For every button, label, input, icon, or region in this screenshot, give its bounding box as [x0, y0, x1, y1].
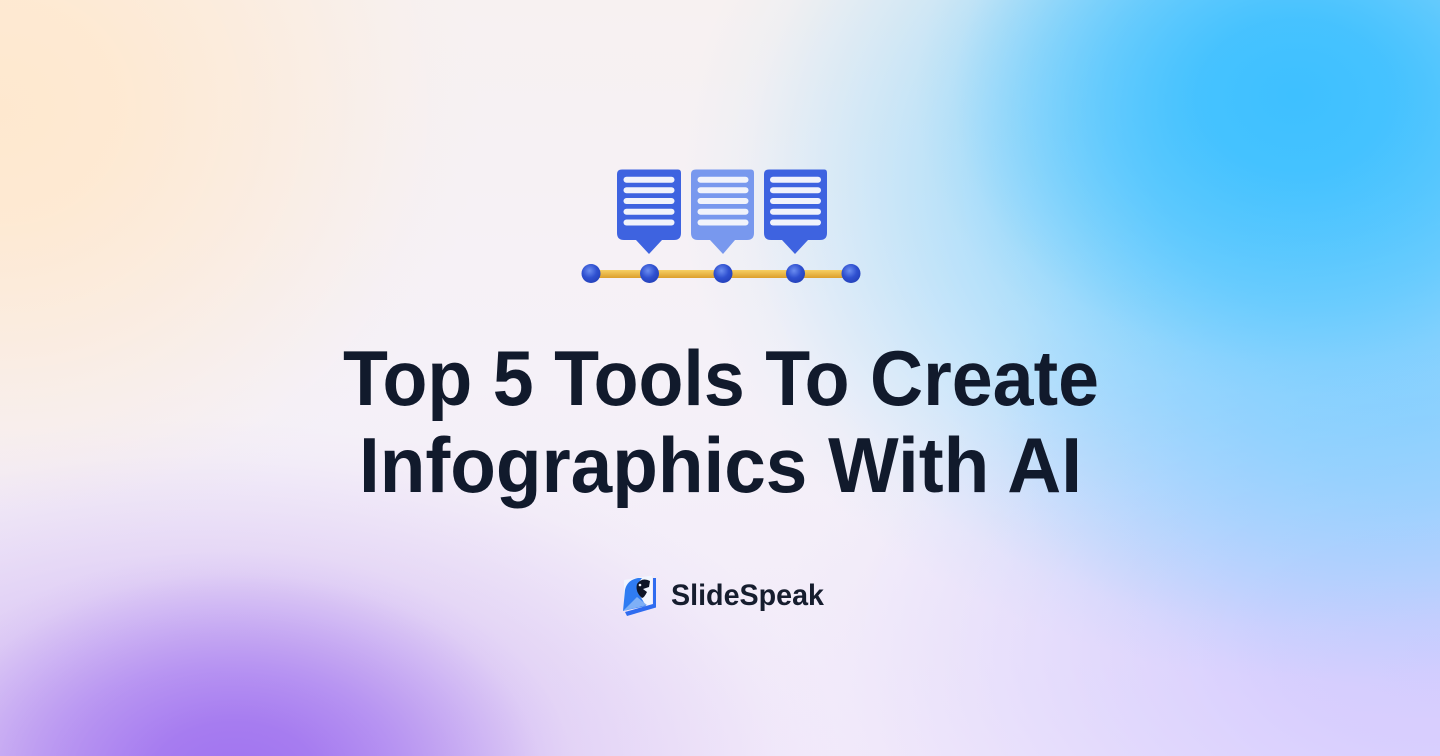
timeline nodes [582, 264, 860, 283]
bubble 2 [691, 170, 754, 254]
title [343, 334, 1099, 509]
logo: SlideSpeak [623, 576, 824, 616]
bubble 3 [764, 170, 827, 254]
title: Top 5 Tools To Create [343, 334, 1099, 422]
bubble 1 [617, 170, 681, 254]
timeline bar [591, 270, 851, 278]
title: Infographics With AI [359, 421, 1082, 509]
wordmark: SlideSpeak [671, 579, 824, 612]
icon: timeline with three speech bubbles [582, 170, 860, 283]
icon: parrot logo [623, 576, 656, 616]
